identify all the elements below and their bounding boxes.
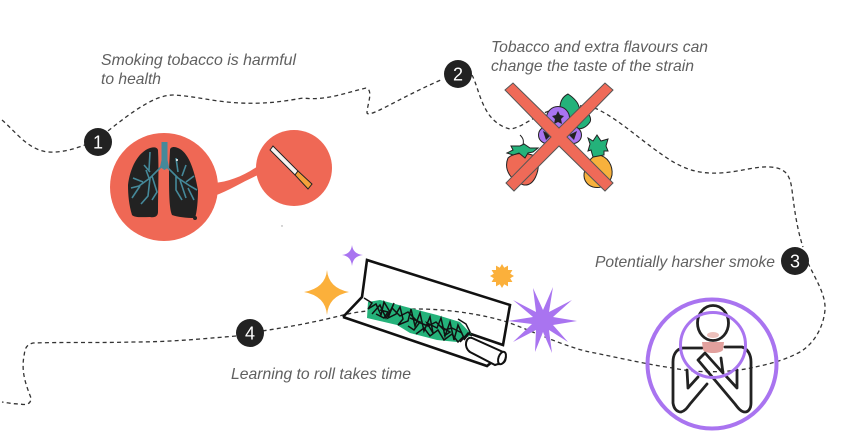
icon: sparkles xyxy=(304,245,577,353)
marker 2 xyxy=(444,60,472,88)
heading 1 xyxy=(101,52,296,88)
lungs xyxy=(128,142,198,220)
heading 2: Tobacco and extra flavours can xyxy=(491,39,708,56)
marker 3: 3 xyxy=(790,252,800,272)
icon: person with sore throat xyxy=(648,300,776,428)
marker 1 xyxy=(84,128,112,156)
blueberries xyxy=(538,126,556,144)
leaves xyxy=(560,94,591,129)
icon: lungs with cigarette bubble xyxy=(110,130,332,241)
strawberry xyxy=(507,154,538,185)
marker 4: 4 xyxy=(245,324,255,344)
cigarette xyxy=(270,146,312,189)
marker 4 xyxy=(236,319,264,347)
marker 3 xyxy=(781,247,809,275)
red X xyxy=(505,83,613,191)
icon: crossed-out fruit xyxy=(505,83,613,191)
marker 1: 1 xyxy=(93,132,103,152)
heading 1: Smoking tobacco is harmful xyxy=(101,52,296,69)
heading 3: Potentially harsher smoke xyxy=(595,254,775,271)
heading 2 xyxy=(491,39,708,75)
heading 1: to health xyxy=(101,71,161,88)
rolled paper xyxy=(466,338,506,365)
pineapple xyxy=(584,155,612,188)
icon: rolling paper xyxy=(343,260,510,366)
tobacco xyxy=(364,298,472,342)
heading 4: Learning to roll takes time xyxy=(231,366,411,383)
heading 2: change the taste of the strain xyxy=(491,58,694,75)
marker 2: 2 xyxy=(453,64,463,84)
dashed path xyxy=(2,75,825,404)
